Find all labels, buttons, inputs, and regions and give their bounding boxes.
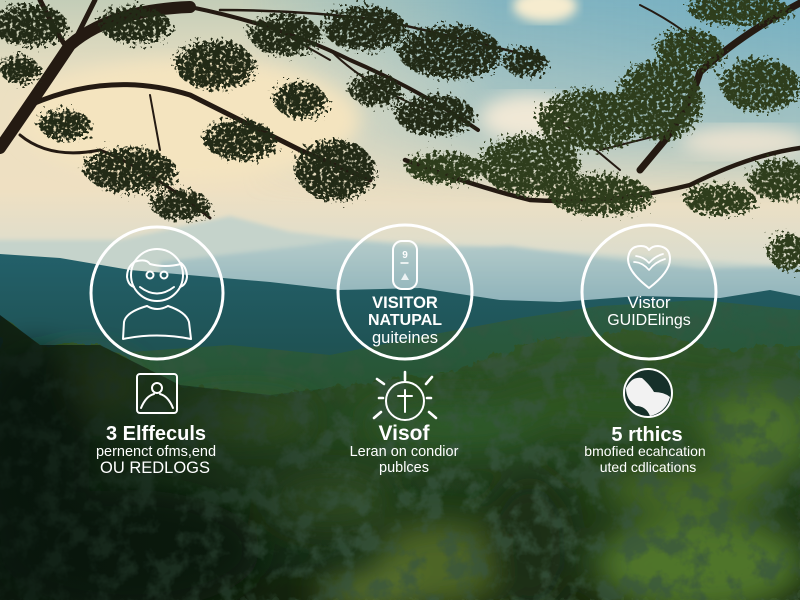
column 3: caption: uted cdlications — [600, 459, 696, 475]
column 1: caption: pernenct ofms,end — [96, 444, 216, 460]
column 3: caption: bmofied ecahcation — [584, 443, 706, 459]
ring: portrait badge — [91, 227, 223, 359]
column 3: caption: 5 rthics — [611, 424, 683, 446]
column 2: compass icon — [374, 372, 436, 420]
heading: natural guidelines: guiteines — [372, 329, 438, 347]
background: left shadow — [0, 315, 800, 600]
column 1: caption: OU REDLOGS — [100, 459, 210, 477]
column 2: natural guidelines badge — [338, 225, 472, 359]
ring: guidelines badge — [338, 225, 472, 359]
heading: natural guidelines: VISITOR — [372, 294, 438, 312]
heading: visitor guidelines: GUIDElings — [607, 312, 691, 329]
heading: visitor guidelines — [607, 293, 691, 329]
column 1: caption — [96, 423, 216, 477]
icon: person face — [123, 249, 191, 339]
column 2: caption: Leran on condior — [350, 444, 459, 460]
heading: visitor guidelines: Vistor — [627, 293, 671, 312]
background: sky — [0, 0, 800, 270]
column 2: caption: Visof — [379, 422, 430, 445]
heading: natural guidelines — [368, 294, 442, 347]
tree: left pine branches — [0, 0, 545, 218]
background: teal ridge — [0, 254, 800, 420]
column 1: caption: 3 Elffeculs — [106, 423, 206, 445]
icon: guide pill: 9 — [402, 250, 408, 261]
column 3: globe icon — [624, 369, 672, 417]
tree: left pine foliage — [0, 5, 547, 220]
icon: heart with bird — [628, 246, 670, 288]
column 3: caption — [584, 424, 706, 475]
background: distant mountains — [0, 216, 800, 330]
tree: right pine branches — [405, 3, 800, 201]
heading: natural guidelines: NATUPAL — [368, 312, 442, 329]
tree: right pine foliage — [405, 0, 800, 270]
column 1: small profile icon — [137, 374, 177, 413]
column 1: visitor portrait badge — [91, 227, 223, 359]
column 2: caption: publces — [379, 460, 429, 476]
background: forest canopy — [0, 315, 800, 600]
column 3: visitor guidelines badge — [582, 225, 716, 359]
background: middle ridge — [130, 300, 800, 460]
ring: visitor badge — [582, 225, 716, 359]
column 2: caption — [350, 422, 459, 476]
